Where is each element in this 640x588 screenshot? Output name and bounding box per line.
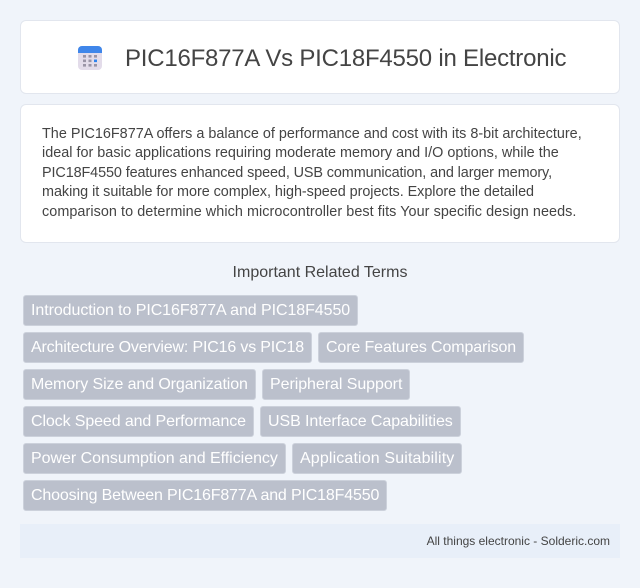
tag: Core Features Comparison <box>326 339 516 356</box>
tag: Application Suitability <box>300 450 454 467</box>
tag <box>23 332 312 363</box>
tag: Power Consumption and Efficiency <box>31 450 278 467</box>
tag: Architecture Overview: PIC16 vs PIC18 <box>31 339 304 356</box>
text block: description: making it suitable for more complex, high-speed projects. Explore the detailed <box>42 184 534 200</box>
tag <box>23 406 254 437</box>
icon: calendar keypad <box>78 46 102 70</box>
tag: USB Interface Capabilities <box>268 413 453 430</box>
text block: description: comparison to determine which microcontroller best fits Your specific design needs. <box>42 204 576 220</box>
tag <box>23 480 387 511</box>
text block: description <box>42 126 582 220</box>
text block: description: The PIC16F877A offers a balance of performance and cost with its 8-bit architecture, <box>42 126 582 142</box>
tag <box>23 369 256 400</box>
tag <box>260 406 461 437</box>
tag: Memory Size and Organization <box>31 376 248 393</box>
tag: Clock Speed and Performance <box>31 413 246 430</box>
tag: Choosing Between PIC16F877A and PIC18F4550 <box>31 487 379 504</box>
tag: Peripheral Support <box>270 376 402 393</box>
panel: description card <box>20 104 620 243</box>
panel: title card <box>20 20 620 94</box>
tag <box>23 295 358 326</box>
heading: related terms: Important Related Terms <box>233 264 407 281</box>
title: PIC16F877A Vs PIC18F4550 in Electronic <box>125 45 566 72</box>
panel: tag list <box>23 295 524 511</box>
footer <box>20 524 620 558</box>
tag: Introduction to PIC16F877A and PIC18F4550 <box>31 302 350 319</box>
tag <box>318 332 524 363</box>
text block: description: PIC18F4550 features enhanced speed, USB communication, and larger memory, <box>42 165 552 181</box>
footer text: All things electronic - Solderic.com <box>427 534 610 548</box>
tag <box>262 369 410 400</box>
text block: description: ideal for basic applications requiring moderate memory and I/O options, while the <box>42 145 559 161</box>
tag <box>23 443 286 474</box>
tag <box>292 443 462 474</box>
